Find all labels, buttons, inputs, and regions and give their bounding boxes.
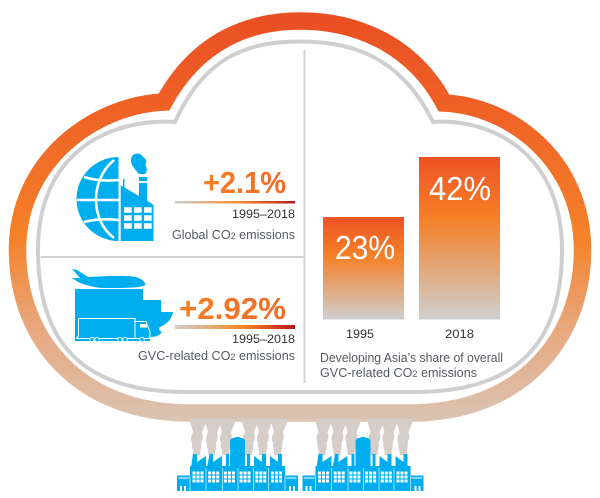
years: 1995–2018	[232, 207, 295, 221]
chart caption: GVC-related CO2 emissions	[320, 366, 477, 380]
gradient rule	[175, 325, 295, 329]
icon: globe and factory	[76, 153, 154, 241]
bar 2018	[419, 157, 500, 320]
caption: GVC-related CO2 emissions	[138, 349, 295, 363]
caption: Global CO2 emissions	[172, 228, 295, 242]
axis label 2018: 2018	[445, 327, 474, 341]
years: 1995–2018	[232, 332, 295, 346]
icon: factories with smoke, right	[302, 419, 424, 491]
bar 1995: 23%	[335, 229, 395, 266]
stat: +2.1%: +2.1%	[203, 165, 286, 200]
cloud outline: orange gradient	[18, 21, 582, 413]
bar chart: Developing Asia's share	[320, 157, 503, 380]
chart caption: Developing Asia’s share of overall	[320, 351, 503, 365]
stat: +2.92%: +2.92%	[179, 291, 286, 326]
panel: GVC-related CO2 emissions	[72, 269, 295, 363]
panel: global CO2 emissions	[76, 153, 295, 242]
icon: plane, ship and truck	[72, 269, 173, 342]
bar 1995	[323, 217, 404, 320]
panel dividers	[41, 50, 304, 383]
gradient rule	[175, 201, 295, 204]
bar 2018: 42%	[429, 170, 491, 207]
cloud inner outline: grey	[38, 42, 562, 392]
icon: factories with smoke, left	[177, 419, 298, 491]
axis label 1995: 1995	[346, 327, 374, 341]
chart caption	[320, 351, 503, 380]
